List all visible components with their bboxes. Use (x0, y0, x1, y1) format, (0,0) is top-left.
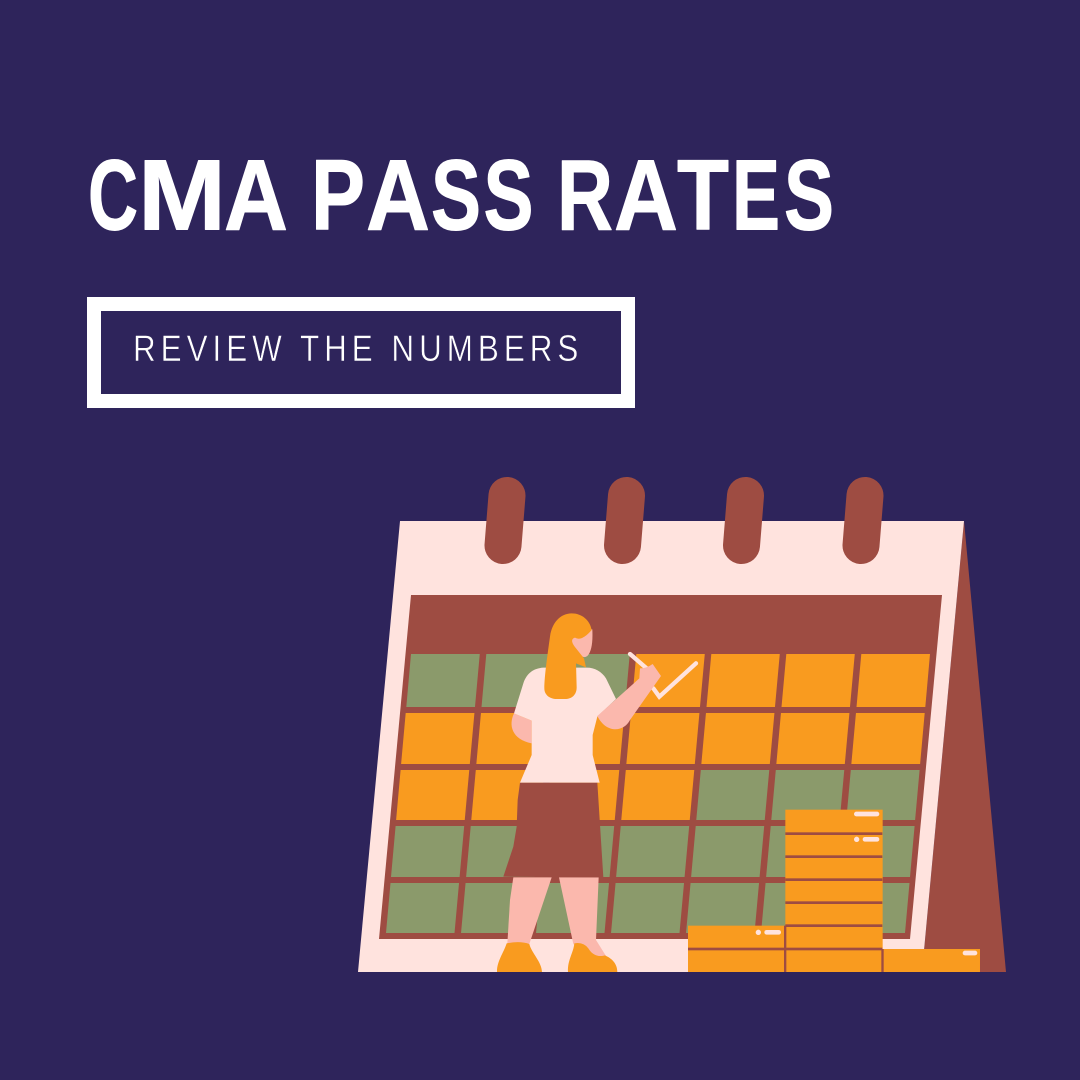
subtitle: REVIEW THE NUMBERS (133, 329, 578, 370)
shirt (514, 668, 616, 783)
title: T (677, 140, 729, 252)
calendar back stand (922, 521, 1006, 972)
title: A (614, 140, 678, 252)
title: C (88, 140, 138, 252)
check mark (653, 663, 696, 697)
title: A (366, 140, 430, 252)
shoes (497, 942, 542, 972)
hair (544, 613, 592, 699)
title: A (224, 140, 288, 252)
stacked orange boxes (688, 810, 980, 972)
calendar page (358, 521, 964, 972)
title: S (784, 140, 834, 252)
title: E (732, 140, 780, 252)
title: S (484, 140, 534, 252)
skirt (503, 783, 603, 877)
front arm and hand (597, 664, 661, 729)
back arm (512, 713, 532, 743)
title: S (431, 140, 481, 252)
legs (507, 877, 552, 944)
calendar frame (379, 595, 942, 939)
face (567, 627, 592, 657)
title: M (138, 140, 226, 252)
calendar binder rings (503, 496, 865, 546)
subtitle box (94, 304, 628, 401)
calendar illustration (358, 496, 1006, 972)
woman figure (497, 613, 696, 972)
pen (630, 654, 647, 668)
calendar grid cells (386, 650, 930, 936)
title: R (557, 140, 613, 252)
title: P (311, 140, 365, 252)
